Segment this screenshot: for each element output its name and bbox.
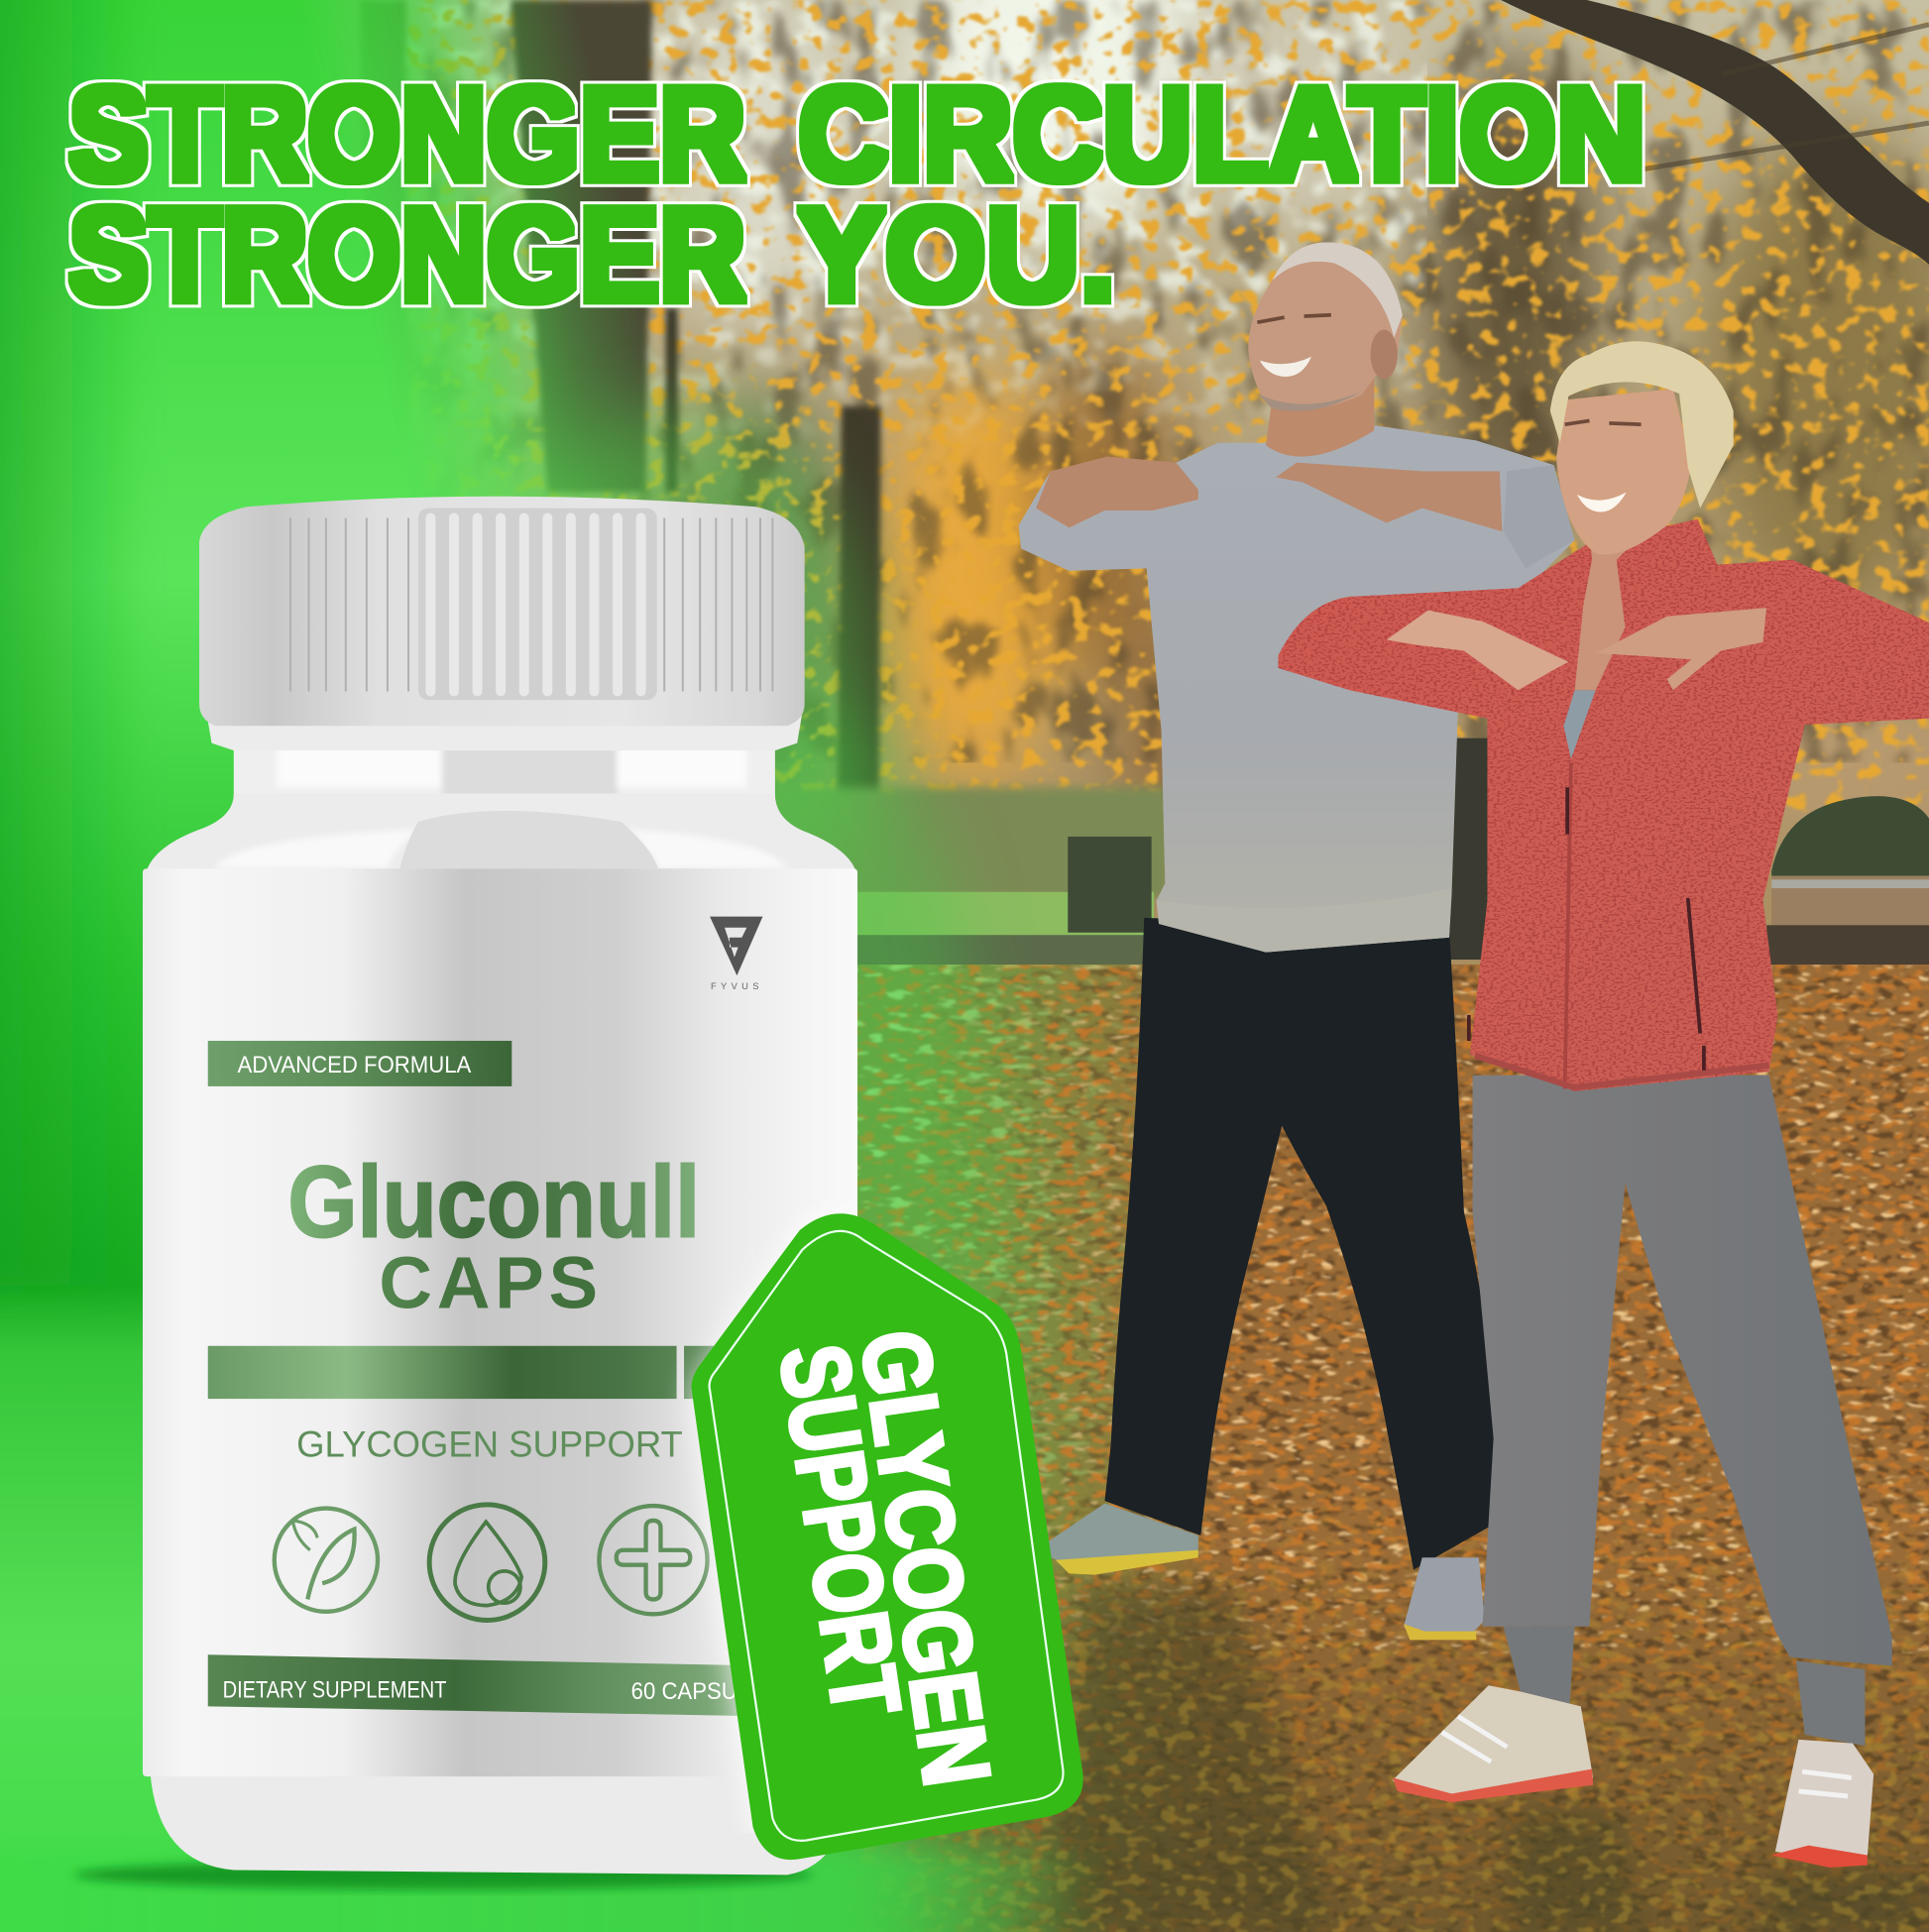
advanced formula badge (208, 1041, 511, 1086)
title headline: STRONGER (69, 60, 745, 208)
cap center grip (418, 509, 657, 700)
title headline: STRONGER (69, 181, 745, 329)
product bottle (143, 497, 857, 1875)
woman neck and chest (1575, 522, 1654, 690)
man head (1248, 242, 1403, 411)
man sweatshirt (1019, 425, 1575, 953)
bottom label band: DIETARY SUPPLEMENT (223, 1677, 447, 1703)
tag white glow on bottle (691, 1215, 1083, 1859)
tag inner stitch line (710, 1231, 1063, 1841)
bottle shoulder (145, 794, 857, 876)
glycogen support tag (691, 1213, 1083, 1860)
icon: blood drop gauge (429, 1505, 545, 1621)
brand logo (710, 917, 763, 991)
park path, wall and bushes (616, 739, 1929, 966)
product name caps: CAPS (379, 1241, 598, 1323)
green gradient overlay on left (0, 0, 1086, 1932)
person: woman exercising (1267, 341, 1929, 1868)
title headline: YOU. (798, 181, 1116, 329)
man trousers (1104, 918, 1497, 1570)
man left shoe (1048, 1504, 1198, 1575)
tag shape (691, 1213, 1083, 1860)
bottle neck (206, 714, 802, 812)
man left hand and forearm (1036, 456, 1198, 527)
woman undershirt (1563, 690, 1596, 759)
woman hair (1550, 341, 1734, 509)
woman right shoe (1771, 1740, 1873, 1868)
woman socks (1504, 1627, 1865, 1746)
tree trunks (359, 0, 881, 861)
bottle base (150, 1771, 851, 1875)
tag text line 2: SUPPORT (759, 1338, 921, 1723)
man right shoe (1404, 1557, 1485, 1640)
bottle body label (143, 868, 857, 1776)
sky and tree canopy (304, 0, 1929, 965)
man neck (1266, 376, 1374, 457)
woman right hand (1596, 608, 1766, 690)
man right hand and forearm (1276, 463, 1502, 531)
woman left hand (1387, 611, 1568, 690)
advanced formula badge: ADVANCED FORMULA (238, 1052, 472, 1079)
woman face (1556, 389, 1691, 554)
cap ribs (290, 518, 772, 691)
bottom label band (208, 1654, 779, 1716)
glycogen support text: GLYCOGEN SUPPORT (296, 1422, 683, 1464)
bottle cap (199, 497, 805, 726)
woman trousers (1473, 1076, 1892, 1665)
icon: medical plus (599, 1506, 708, 1614)
title headline (69, 60, 1646, 329)
woman red jacket (1267, 516, 1929, 1095)
brand logo: FYVUS (711, 981, 763, 991)
woman left shoe (1393, 1685, 1593, 1802)
bottom label band: 60 CAPSULES (631, 1678, 779, 1704)
title headline: CIRCULATION (798, 60, 1646, 208)
tag text line 1: GLYCOGEN (841, 1324, 1010, 1792)
icon: leaf (275, 1509, 378, 1612)
green divider bar (208, 1346, 745, 1399)
ground with fallen leaves (834, 965, 1929, 1932)
person: man exercising (1019, 242, 1575, 1640)
product name: Gluconull (287, 1145, 700, 1258)
